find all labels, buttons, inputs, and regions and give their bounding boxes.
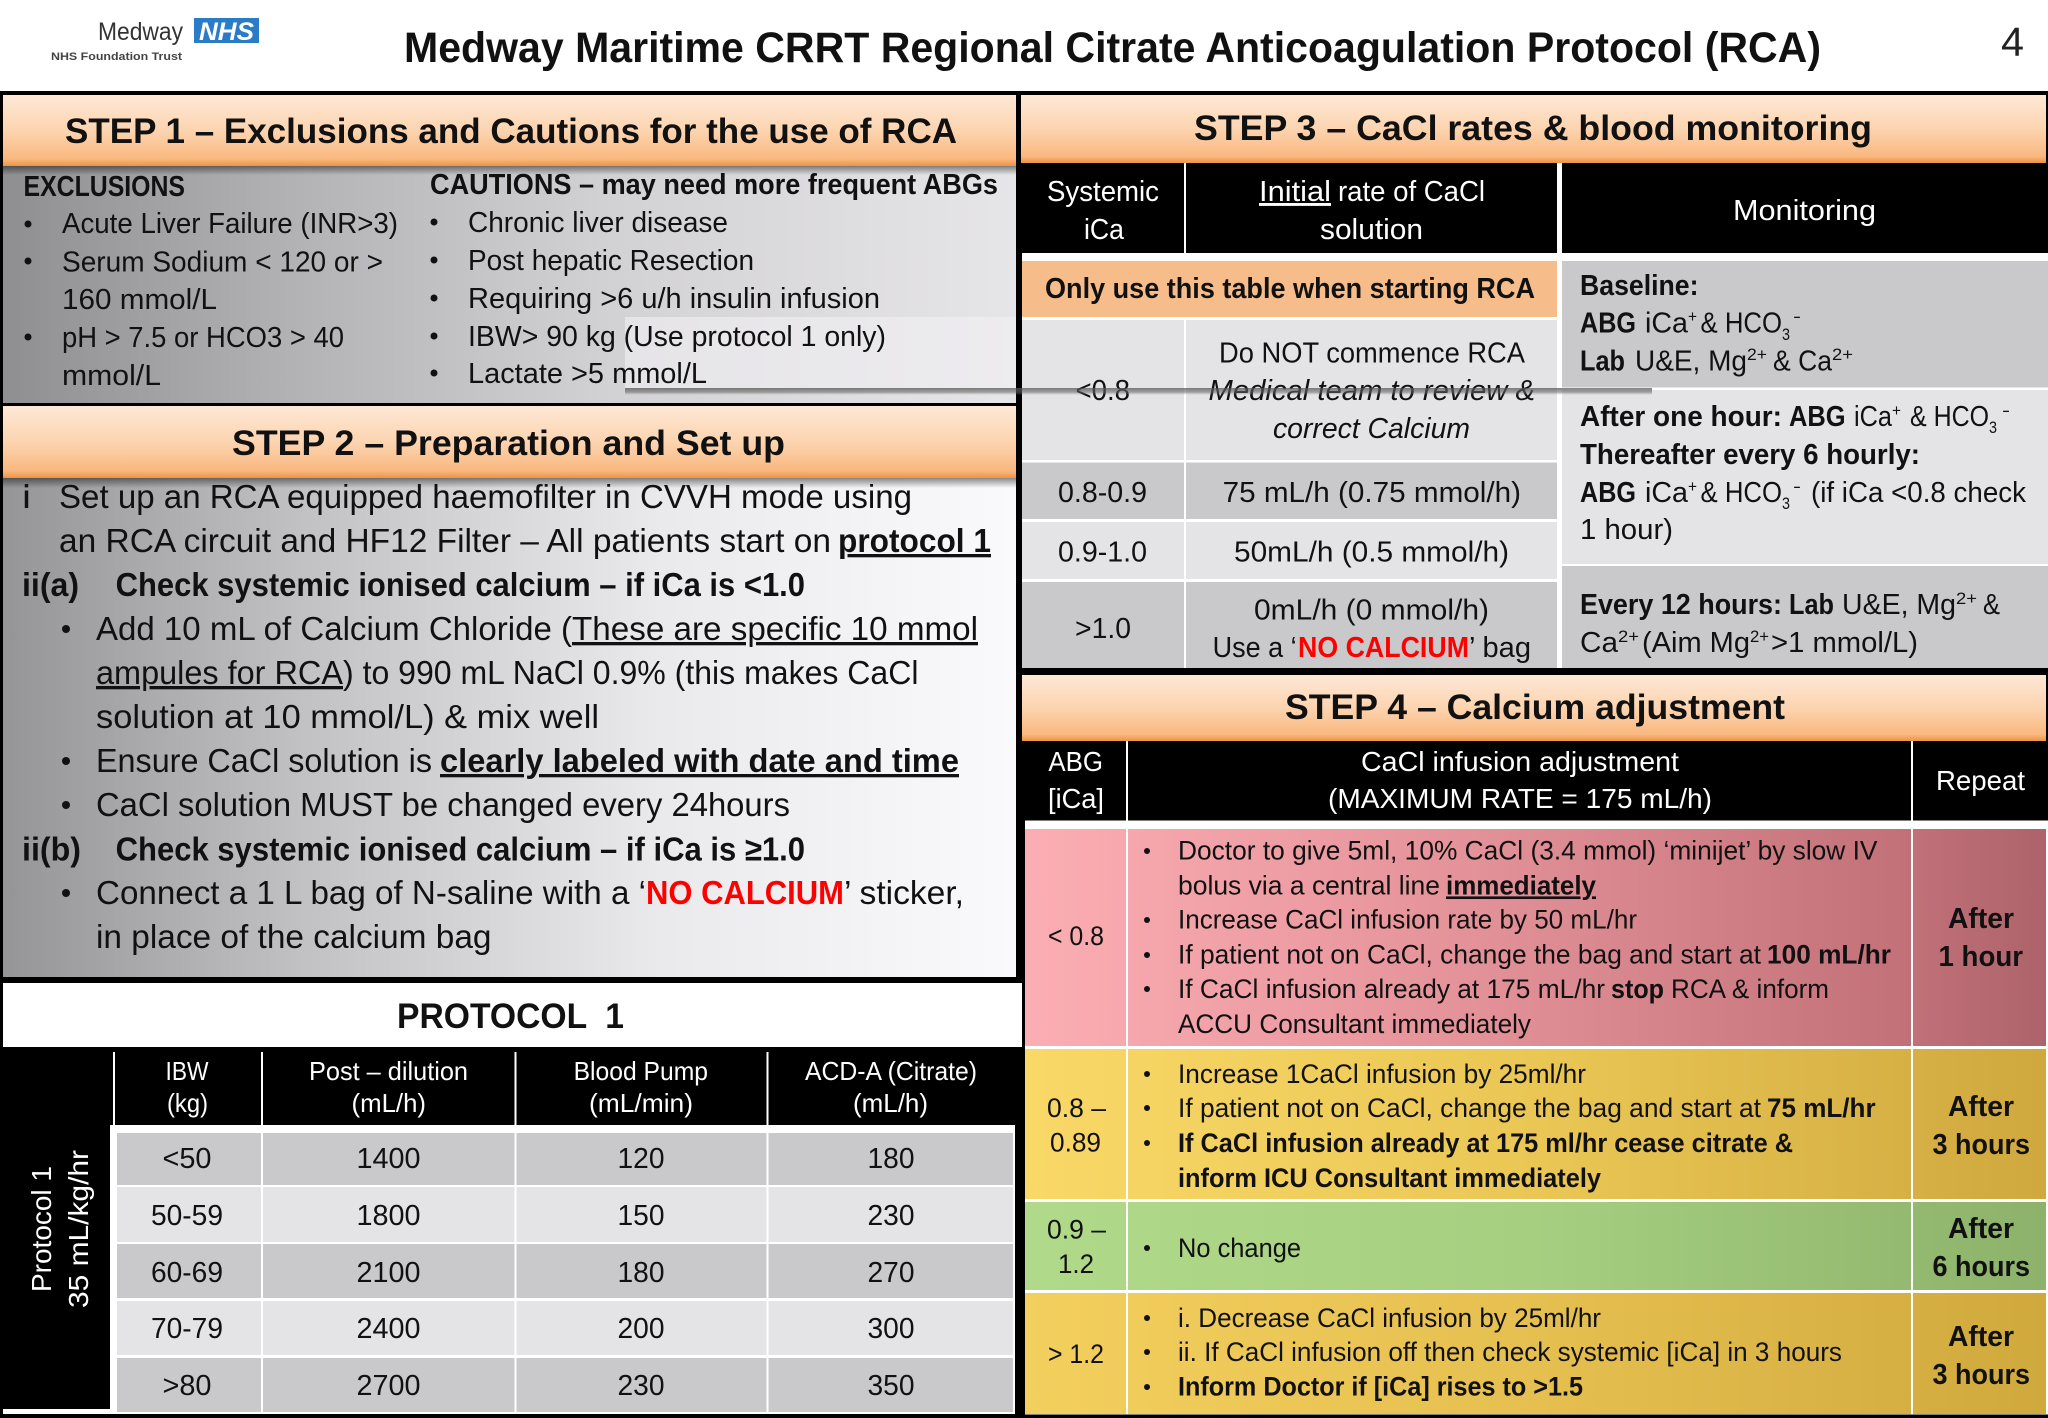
cautions list: Lactate >5 mmol/L: [468, 358, 707, 390]
step 3 table header: iCa: [1084, 214, 1125, 246]
monitoring: baseline: [1562, 261, 2048, 388]
monitoring: baseline: & Ca: [1773, 346, 1833, 378]
table rows: 180: [868, 1143, 914, 1175]
table rows: 270: [868, 1257, 914, 1289]
monitoring: after one hour and six hourly: iCa: [1854, 401, 1893, 433]
monitoring: baseline: -: [1793, 307, 1801, 326]
row: iCa above 1.2: i. Decrease CaCl infusion by 25ml/hr: [1178, 1303, 1601, 1333]
monitoring: baseline: U&E, Mg: [1635, 346, 1747, 378]
table rows: <50: [162, 1143, 212, 1175]
table rows: 2700: [356, 1370, 420, 1402]
table header: Post – dilution: [309, 1056, 468, 1086]
monitoring: after one hour and six hourly: +: [1892, 401, 1901, 420]
item ii(a): ampules for RCA: [96, 654, 343, 691]
monitoring: after one hour and six hourly: ABG: [1789, 401, 1846, 433]
table rows: starting CaCl rates: Medical team to review &: [1208, 375, 1535, 407]
panel: step 1 exclusions and cautions: [3, 95, 1016, 403]
table rows: 200: [618, 1313, 664, 1345]
cautions list: Post hepatic Resection: [468, 245, 754, 277]
exclusions list: EXCLUSIONS: [24, 171, 185, 203]
monitoring: every 12 hours: 2+: [1618, 627, 1639, 646]
table rows: 2400: [356, 1313, 420, 1345]
side label: 35 mL/kg/hr: [63, 1150, 94, 1308]
step 2 heading: STEP 2 – Preparation and Set up: [232, 424, 785, 463]
item i: protocol 1: [838, 522, 991, 559]
item ii(b): NO CALCIUM: [646, 874, 844, 911]
row: iCa 0.8 to 0.89: 3 hours: [1932, 1129, 2030, 1161]
table rows: >80: [162, 1370, 212, 1402]
row: iCa below 0.8: < 0.8: [1048, 921, 1104, 951]
monitoring: baseline: & HCO: [1700, 308, 1782, 340]
table rows: 180: [618, 1257, 664, 1289]
item ii(a): These are specific 10 mmol: [572, 610, 978, 647]
logo: Medway NHS Foundation Trust: NHS: [199, 18, 254, 46]
monitoring: every 12 hours: (Aim Mg: [1642, 627, 1750, 659]
exclusions list: [24, 171, 398, 392]
table rows: starting CaCl rates: 75 mL/h (0.75 mmol/h): [1223, 477, 1521, 509]
step 4 table header: CaCl infusion adjustment: [1361, 746, 1679, 777]
table rows: 1400: [356, 1143, 420, 1175]
step 3 table header: solution: [1320, 214, 1423, 246]
logo: Medway NHS Foundation Trust: NHS Foundation Trust: [51, 51, 182, 63]
table rows: 50-59: [151, 1200, 223, 1232]
row: iCa below 0.8: Doctor to give 5ml, 10% CaCl (3.4 mmol) ‘minijet’ by slow IV: [1178, 836, 1878, 866]
exclusions list: Acute Liver Failure (INR>3): [62, 208, 398, 240]
table rows: starting CaCl rates: [1022, 320, 1557, 668]
item ii(a): clearly labeled with date and time: [440, 742, 959, 779]
row: iCa above 1.2: Inform Doctor if [iCa] rises to >1.5: [1178, 1372, 1583, 1402]
step 4 table header: ABG: [1048, 746, 1103, 777]
item ii(b): Check systemic ionised calcium – if iCa is ≥1.0: [116, 831, 805, 868]
monitoring: every 12 hours: 2+: [1956, 589, 1977, 608]
row: iCa below 0.8: 1 hour: [1938, 941, 2023, 973]
row: iCa below 0.8: stop: [1611, 974, 1664, 1004]
row: iCa above 1.2: [1025, 1293, 2046, 1414]
table rows: starting CaCl rates: 0.9-1.0: [1058, 537, 1147, 569]
monitoring: every 12 hours: >1 mmol/L): [1771, 627, 1918, 659]
table header: (kg): [167, 1088, 208, 1118]
row: iCa below 0.8: If CaCl infusion already at 175 mL/hr: [1178, 974, 1605, 1004]
table rows: starting CaCl rates: <0.8: [1076, 375, 1130, 407]
exclusions list: 160 mmol/L: [62, 284, 217, 316]
monitoring: after one hour and six hourly: & HCO: [1910, 401, 1989, 433]
row: iCa 0.8 to 0.89: [1025, 1049, 2046, 1199]
table rows: 60-69: [151, 1257, 223, 1289]
cautions list: Chronic liver disease: [468, 207, 728, 239]
item i: an RCA circuit and HF12 Filter – All patients start on: [59, 522, 831, 559]
step 1 heading: [3, 95, 1016, 166]
item ii(b): ’ sticker,: [844, 874, 964, 911]
row: iCa below 0.8: If patient not on CaCl, change the bag and start at: [1178, 940, 1762, 970]
item ii(a): ii(a): [22, 566, 79, 603]
table header: (mL/h): [853, 1088, 928, 1118]
step 3 table header: Systemic: [1047, 176, 1159, 208]
item ii(b): Connect a 1 L bag of N-saline with a ‘: [96, 874, 646, 911]
row: iCa 0.8 to 0.89: 0.8 –: [1047, 1093, 1106, 1123]
row: iCa above 1.2: 3 hours: [1932, 1359, 2030, 1391]
monitoring: baseline: iCa: [1645, 308, 1689, 340]
exclusions list: pH > 7.5 or HCO3 > 40: [62, 322, 344, 354]
table rows: starting CaCl rates: Do NOT commence RCA: [1219, 338, 1526, 370]
exclusions list: mmol/L: [62, 360, 161, 392]
monitoring: every 12 hours: U&E, Mg: [1842, 589, 1956, 621]
monitoring: after one hour and six hourly: -: [1793, 477, 1801, 496]
row: iCa 0.8 to 0.89: inform ICU Consultant immediately: [1178, 1163, 1601, 1193]
monitoring: baseline: ABG: [1580, 308, 1636, 340]
table rows: starting CaCl rates: Use a ‘: [1213, 632, 1297, 664]
row: iCa above 1.2: ii. If CaCl infusion off then check systemic [iCa] in 3 hours: [1178, 1337, 1842, 1367]
item ii(a): Add 10 mL of Calcium Chloride (: [96, 610, 572, 647]
row: iCa above 1.2: After: [1948, 1321, 2014, 1353]
row: iCa below 0.8: bolus via a central line: [1178, 870, 1440, 900]
monitoring: after one hour and six hourly: 3: [1782, 494, 1790, 513]
monitoring: after one hour and six hourly: +: [1688, 477, 1697, 496]
item ii(b): [22, 831, 964, 955]
monitoring: after one hour and six hourly: ABG: [1580, 477, 1636, 509]
monitoring: after one hour and six hourly: (if iCa <0.8 check: [1811, 477, 2026, 509]
monitoring: after one hour and six hourly: [1562, 390, 2048, 564]
cautions list: CAUTIONS – may need more frequent ABGs: [430, 169, 998, 201]
monitoring: baseline: Lab: [1580, 346, 1625, 378]
row: iCa below 0.8: ACCU Consultant immediately: [1178, 1009, 1532, 1039]
table rows: starting CaCl rates: 0.8-0.9: [1058, 477, 1147, 509]
step 4 heading: [1022, 675, 2046, 741]
monitoring: every 12 hours: &: [1983, 589, 2000, 621]
row: iCa 0.9 to 1.2: After: [1948, 1213, 2014, 1245]
item i: Set up an RCA equipped haemofilter in CVVH mode using: [59, 478, 912, 515]
table rows: 230: [868, 1200, 914, 1232]
item ii(b): ii(b): [22, 831, 81, 868]
step 4 table header: (MAXIMUM RATE = 175 mL/h): [1328, 783, 1712, 814]
table rows: 300: [868, 1313, 914, 1345]
monitoring: after one hour and six hourly: Thereafter every 6 hourly:: [1580, 439, 1920, 471]
item ii(a): [22, 566, 978, 823]
table rows: starting CaCl rates: correct Calcium: [1273, 413, 1470, 445]
row: iCa 0.9 to 1.2: 0.9 –: [1047, 1214, 1106, 1244]
monitoring: after one hour and six hourly: -: [2002, 401, 2010, 420]
monitoring: every 12 hours: [1562, 566, 2048, 668]
table rows: 1800: [356, 1200, 420, 1232]
item ii(a): solution at 10 mmol/L) & mix well: [96, 698, 599, 735]
row: iCa 0.9 to 1.2: 6 hours: [1932, 1251, 2030, 1283]
protocol 1 table: [3, 1052, 1015, 1414]
table rows: 120: [618, 1143, 664, 1175]
protocol 1 heading: [0, 977, 1025, 1051]
logo: Medway NHS Foundation Trust: Medway: [98, 18, 183, 46]
cautions list: [430, 169, 998, 390]
panel: step 4 calcium adjustment: [1022, 675, 2048, 1414]
table header: (mL/min): [589, 1088, 693, 1118]
cautions list: IBW> 90 kg (Use protocol 1 only): [468, 321, 886, 353]
row: iCa 0.8 to 0.89: 0.89: [1050, 1128, 1101, 1158]
step 3 table header: Initial: [1259, 176, 1331, 208]
monitoring: every 12 hours: 2+: [1750, 627, 1769, 646]
monitoring: after one hour and six hourly: iCa: [1645, 477, 1689, 509]
panel: protocol 1: [0, 977, 1025, 1414]
step 4 heading: STEP 4 – Calcium adjustment: [1285, 688, 1785, 727]
table header: Blood Pump: [574, 1056, 708, 1086]
step 3 table header: rate of CaCl: [1338, 176, 1485, 208]
row: iCa below 0.8: 100 mL/hr: [1767, 940, 1891, 970]
table rows: 2100: [356, 1257, 420, 1289]
table rows: starting CaCl rates: NO CALCIUM: [1298, 632, 1469, 664]
step 4 table header: [iCa]: [1048, 783, 1104, 814]
table rows: starting CaCl rates: ’ bag: [1469, 632, 1531, 664]
item ii(a): Check systemic ionised calcium – if iCa is <1.0: [116, 566, 805, 603]
title: Medway Maritime CRRT Regional Citrate Anticoagulation Protocol (RCA): [404, 24, 1821, 72]
row: iCa 0.8 to 0.89: If CaCl infusion already at 175 ml/hr cease citrate &: [1178, 1128, 1793, 1158]
cautions list: Requiring >6 u/h insulin infusion: [468, 283, 880, 315]
monitoring: after one hour and six hourly: After one hour:: [1580, 401, 1782, 433]
note: only use this table when starting RCA: [1022, 261, 1557, 317]
panel: step 2 preparation and set up: [3, 406, 1016, 977]
table rows: starting CaCl rates: 0mL/h (0 mmol/h): [1254, 594, 1489, 626]
row: iCa below 0.8: After: [1948, 903, 2014, 935]
monitoring: baseline: Baseline:: [1580, 270, 1698, 302]
item ii(b): in place of the calcium bag: [96, 918, 491, 955]
table rows: [151, 1143, 914, 1402]
table rows: 150: [618, 1200, 664, 1232]
monitoring: baseline: 2+: [1832, 345, 1853, 364]
note: only use this table when starting RCA: Only use this table when starting RCA: [1045, 273, 1535, 305]
row: iCa 0.9 to 1.2: No change: [1178, 1233, 1301, 1263]
table rows: starting CaCl rates: 50mL/h (0.5 mmol/h): [1234, 537, 1509, 569]
row: iCa below 0.8: immediately: [1446, 870, 1596, 900]
step 3 table header: [1022, 163, 2048, 253]
item ii(a): CaCl solution MUST be changed every 24hours: [96, 786, 790, 823]
step 4 table header: [1025, 741, 2048, 821]
monitoring: baseline: +: [1688, 307, 1697, 326]
table rows: 70-79: [151, 1313, 223, 1345]
logo: Medway NHS Foundation Trust: [51, 18, 259, 63]
page number: 4: [2001, 19, 2024, 65]
step 1 heading: STEP 1 – Exclusions and Cautions for the use of RCA: [65, 112, 957, 151]
monitoring: after one hour and six hourly: & HCO: [1700, 477, 1782, 509]
table rows: 230: [618, 1370, 664, 1402]
row: iCa 0.8 to 0.89: 75 mL/hr: [1767, 1093, 1876, 1123]
item i: i: [23, 478, 30, 515]
item ii(a): ) to 990 mL NaCl 0.9% (this makes CaCl: [343, 654, 918, 691]
side label: [26, 1150, 94, 1308]
table header: [113, 1052, 977, 1125]
row: iCa 0.8 to 0.89: After: [1948, 1091, 2014, 1123]
table header: IBW: [166, 1056, 209, 1086]
table rows: starting CaCl rates: >1.0: [1075, 613, 1131, 645]
step 3 heading: STEP 3 – CaCl rates & blood monitoring: [1194, 109, 1872, 148]
item i: [23, 478, 991, 559]
monitoring: every 12 hours: Lab: [1789, 589, 1834, 621]
protocol 1 heading: PROTOCOL 1: [397, 997, 624, 1036]
step 2 heading: [3, 406, 1016, 478]
table rows: 350: [868, 1370, 914, 1402]
item ii(a): Ensure CaCl solution is: [96, 742, 432, 779]
exclusions list: Serum Sodium < 120 or >: [62, 246, 383, 278]
step 3 heading: [1021, 95, 2046, 163]
table header: ACD-A (Citrate): [805, 1056, 977, 1086]
monitoring: baseline: 2+: [1747, 345, 1767, 364]
monitoring: after one hour and six hourly: 1 hour): [1580, 514, 1673, 546]
monitoring: after one hour and six hourly: 3: [1989, 418, 1997, 437]
row: iCa 0.8 to 0.89: If patient not on CaCl, change the bag and start at: [1178, 1093, 1762, 1123]
row: iCa 0.9 to 1.2: 1.2: [1058, 1249, 1094, 1279]
side label: Protocol 1: [26, 1166, 57, 1292]
panel: step 3 CaCl rates and blood monitoring: [1021, 95, 2048, 668]
row: iCa 0.9 to 1.2: [1025, 1202, 2046, 1290]
monitoring: every 12 hours: Ca: [1580, 627, 1619, 659]
row: iCa below 0.8: Increase CaCl infusion rate by 50 mL/hr: [1178, 905, 1637, 935]
monitoring: every 12 hours: Every 12 hours:: [1580, 589, 1782, 621]
row: iCa above 1.2: > 1.2: [1048, 1339, 1104, 1369]
table header: (mL/h): [352, 1088, 426, 1118]
row: iCa 0.8 to 0.89: Increase 1CaCl infusion by 25ml/hr: [1178, 1059, 1586, 1089]
row: iCa below 0.8: [1025, 829, 2046, 1046]
step 3 table header: Monitoring: [1733, 195, 1876, 227]
monitoring: baseline: 3: [1782, 325, 1790, 344]
step 4 table header: Repeat: [1936, 765, 2025, 796]
row: iCa below 0.8: RCA & inform: [1671, 974, 1829, 1004]
